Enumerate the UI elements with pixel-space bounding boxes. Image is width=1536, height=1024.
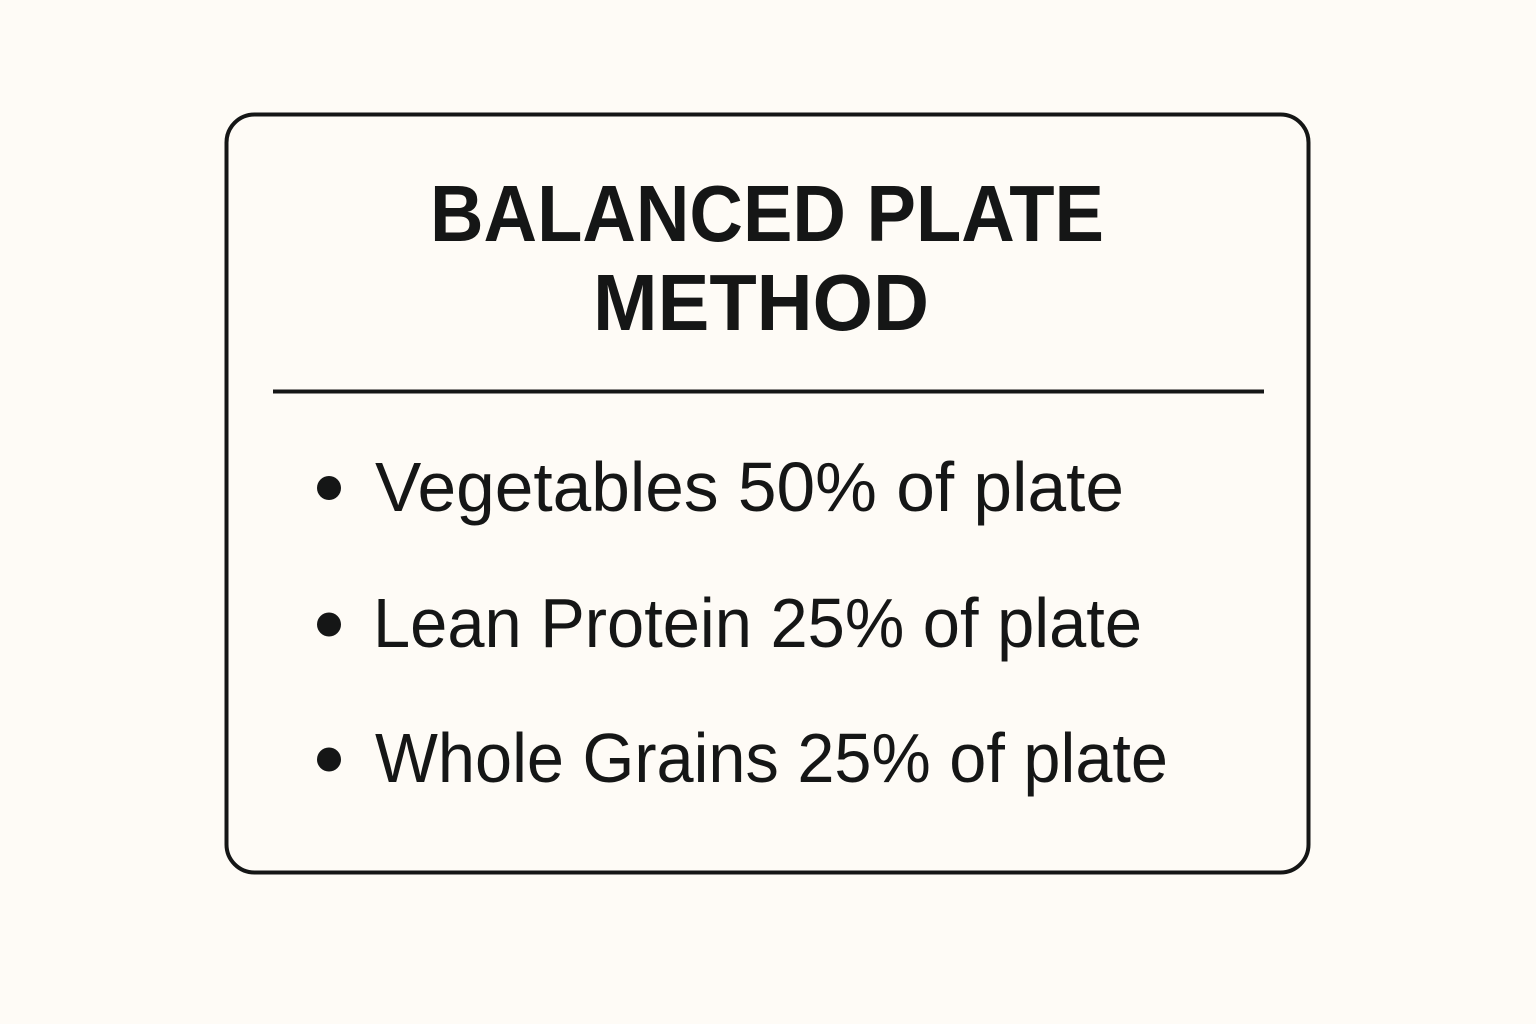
list item: whole grains: Whole Grains 25% of plate	[375, 719, 1168, 797]
title: METHOD	[593, 258, 929, 347]
panel: balanced plate card	[226, 114, 1308, 872]
title	[430, 169, 1104, 347]
list item: lean protein: Lean Protein 25% of plate	[373, 584, 1142, 662]
title: BALANCED PLATE	[430, 169, 1104, 258]
list item: vegetables: Vegetables 50% of plate	[375, 448, 1124, 526]
